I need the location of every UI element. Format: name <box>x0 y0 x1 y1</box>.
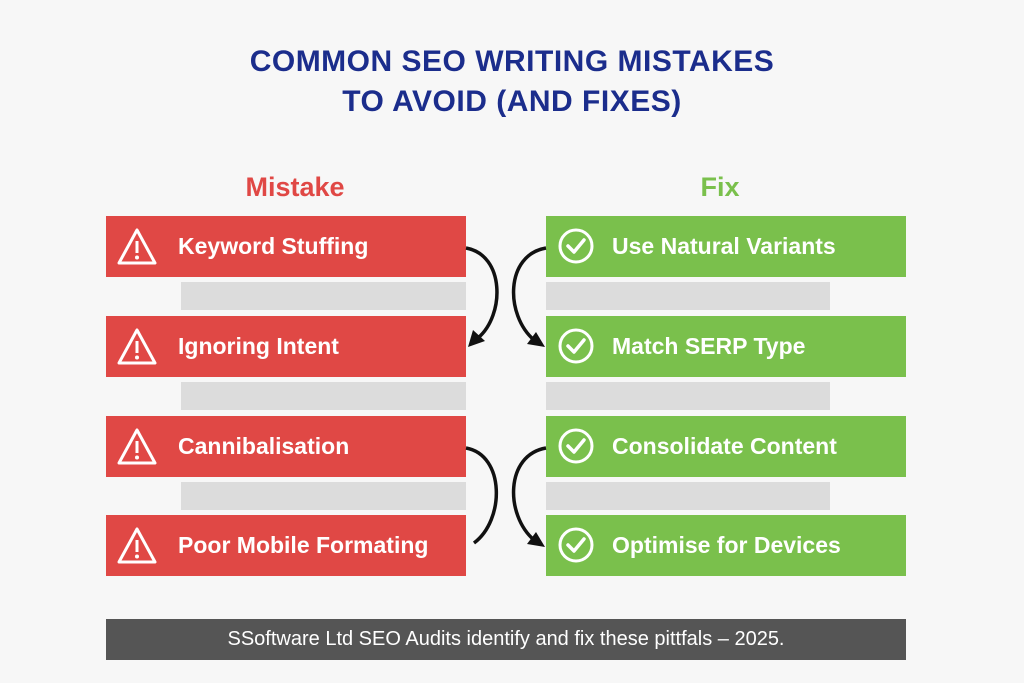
fix: Match SERP Type <box>546 316 906 377</box>
mistake: Cannibalisation <box>106 416 466 477</box>
fix: Consolidate Content: Consolidate Content <box>612 433 837 459</box>
heading: Mistake: Mistake <box>245 172 345 202</box>
mistake: Poor Mobile Formating <box>106 515 466 576</box>
mistake: Cannibalisation: Cannibalisation <box>178 433 349 459</box>
fix: Optimise for Devices: Optimise for Devices <box>612 532 841 558</box>
mistake: Ignoring Intent <box>106 316 466 377</box>
fix: Optimise for Devices <box>546 515 906 576</box>
footer: SSoftware Ltd SEO Audits identify and fix these pittfals – 2025. <box>228 628 784 650</box>
mistake: Poor Mobile Formating: Poor Mobile Formating <box>178 532 428 558</box>
fix: Use Natural Variants <box>546 216 906 277</box>
heading: Fix: Fix <box>700 172 740 202</box>
title: COMMON SEO WRITING MISTAKES <box>250 45 774 78</box>
mistake: Keyword Stuffing: Keyword Stuffing <box>178 233 368 259</box>
mistake: Keyword Stuffing <box>106 216 466 277</box>
footer <box>106 619 906 660</box>
fix: Match SERP Type: Match SERP Type <box>612 333 805 359</box>
fix: Consolidate Content <box>546 416 906 477</box>
title: TO AVOID (AND FIXES) <box>342 85 682 118</box>
fix: Use Natural Variants: Use Natural Variants <box>612 233 836 259</box>
mistake: Ignoring Intent: Ignoring Intent <box>178 333 339 359</box>
title <box>250 45 774 118</box>
